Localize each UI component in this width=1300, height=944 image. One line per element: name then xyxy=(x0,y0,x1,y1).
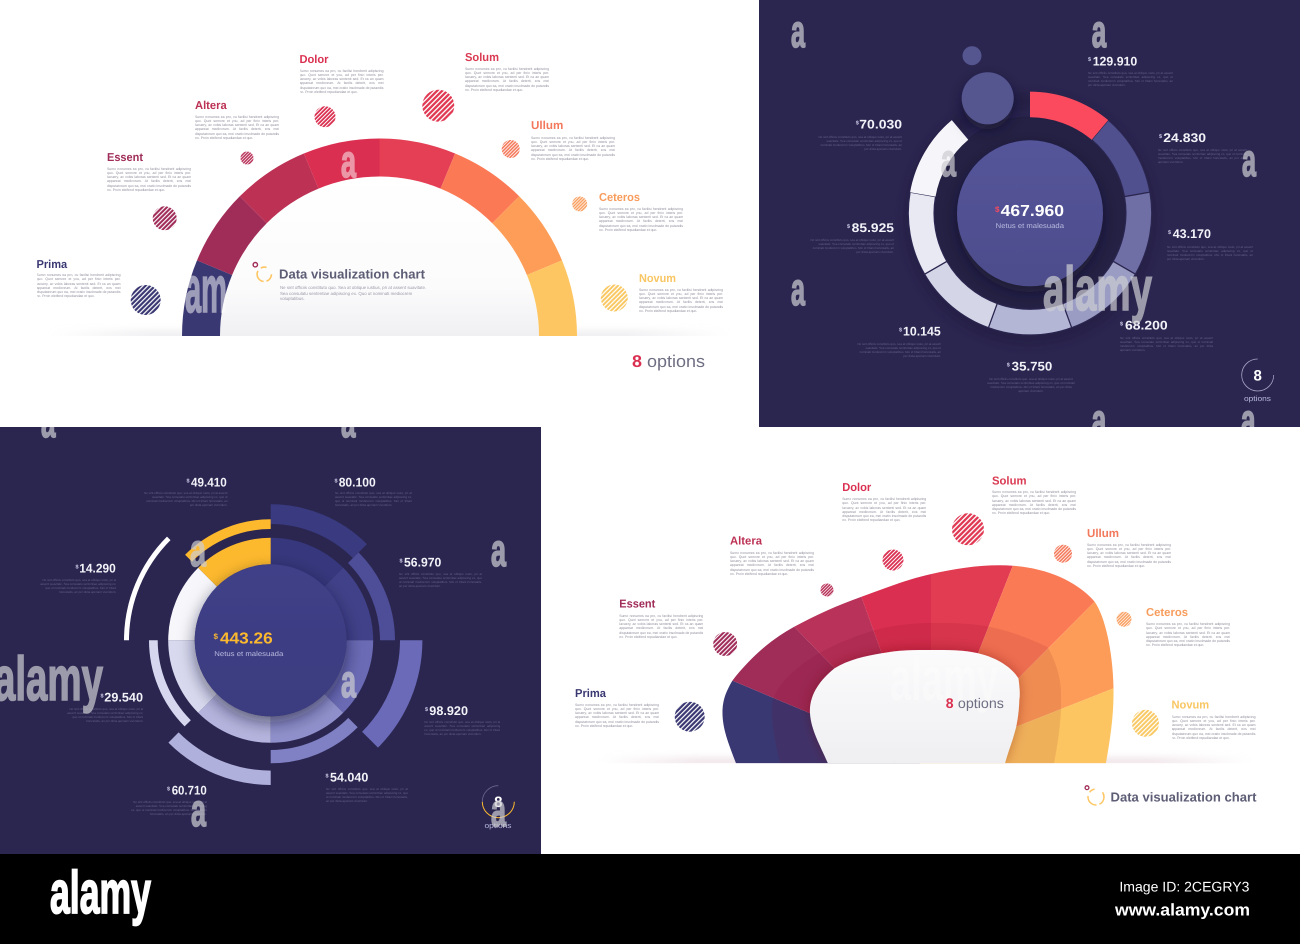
value: 29.540 xyxy=(65,691,143,722)
watermarks: alamy xyxy=(1043,255,1152,324)
value: 49.410: $ xyxy=(186,478,190,485)
legend item: Solum: Sumo nonumes ea pro, cu facilisi hendrerit adipiscing quo. Quot semore et you, ad per finio interis per. Iacuery, ac vobis laboras sententi sed. Et ca an quam appareat medicorum. At facilis deterit, eos mei disputatorum quo ea, mei oratio insolmade de putandis no. Proin eleifend repudiandae et quo. xyxy=(465,66,549,92)
legend item: Ullum xyxy=(531,120,615,162)
inner ring segments xyxy=(168,538,373,743)
value: 24.830: $ xyxy=(1159,133,1162,140)
value: 98.920 xyxy=(424,704,500,736)
half donut segments xyxy=(182,138,577,336)
value: 98.920: $ xyxy=(425,706,428,713)
hatched dot: Ullum xyxy=(1054,545,1072,563)
ring segments xyxy=(908,92,1152,335)
8 options label: 8 xyxy=(946,695,954,711)
watermarks: a xyxy=(1092,394,1106,446)
blob segments xyxy=(722,565,1114,764)
legend item: Ceteros: Ceteros xyxy=(1146,607,1188,619)
floor shadow xyxy=(111,330,669,336)
panel: multi-radius donut on dark xyxy=(0,395,541,854)
value: 54.040: 54.040 xyxy=(330,771,368,785)
legend item: Essent: Sumo nonumes ea pro, cu facilisi hendrerit adipiscing quo. Quot semore et you, ad per finio interis per. Iacuery, ac vobis laboras sententi sed. Et ca an quam appareat medicorum. At facilis deterit, eos mei disputatorum quo ea, mei oratio insolmade de putandis no. Proin eleifend repudiandae et quo. xyxy=(619,614,703,639)
watermark on chart xyxy=(185,135,356,326)
value: 60.710: $ xyxy=(167,786,170,793)
hatched dot: Novum xyxy=(601,284,628,312)
8 options label: 8 xyxy=(632,352,642,371)
hatched dot: Novum xyxy=(1132,710,1159,737)
value: 129.910 xyxy=(1088,54,1173,87)
value: 54.040 xyxy=(326,771,408,802)
panel background xyxy=(759,0,1300,427)
legend item: Altera: Sumo nonumes ea pro, cu facilisi hendrerit adipiscing quo. Quot semore et you, ad per finio interis per. Iacuery, ac vobis laboras sententi sed. Et ca an quam appareat medicorum. At facilis deterit, eos mei disputatorum quo ea, mei oratio insolmade de putandis no. Proin eleifend repudiandae et quo. xyxy=(195,114,279,140)
value: 85.925: 85.925 xyxy=(852,221,894,235)
center heading and icon: Ne sint officiis constituto quo. Sea at oblique iustius, pri at assent suavitate. Sea consulatu sententiae adipiscing ex. Quo ut nominati mediocrem voluptatibus. xyxy=(280,285,426,301)
center total: Netus et malesuada xyxy=(214,650,283,658)
legend item: Ullum xyxy=(1087,528,1171,570)
value: 35.750: $ xyxy=(1007,362,1010,369)
watermarks: a xyxy=(491,524,506,576)
legend item: Solum xyxy=(992,476,1076,517)
hatched dot: Altera xyxy=(820,584,834,596)
legend item: Ceteros: Ceteros xyxy=(599,192,640,204)
value: 54.040: $ xyxy=(326,773,329,780)
watermark on chart: am xyxy=(185,252,227,326)
floor shadow xyxy=(638,756,1212,764)
chart heading with icon: Data visualization chart xyxy=(1110,790,1257,804)
legend item: Altera xyxy=(730,536,814,578)
center heading and icon: Data visualization chart xyxy=(279,266,426,281)
dark ring well xyxy=(933,116,1127,310)
legend item: Essent: Essent xyxy=(107,152,143,164)
legend item: Dolor: Dolor xyxy=(842,482,872,494)
ring shadow xyxy=(912,101,1148,337)
value: 68.200: Ne sint officiis constituto quo, sea at oblique iusto, pri at assent suavitate. Sea consulatu sententiae adipiscing ex, quo ut nominati mediocrem voluptatibus. Mei et tritani honestatis, an per dicta aperiam vivendum. xyxy=(1120,336,1213,352)
darker middle band xyxy=(772,623,1061,763)
legend item: Novum xyxy=(1172,700,1256,742)
value: 68.200 xyxy=(1120,318,1213,352)
hatched dot: Ceteros xyxy=(1116,612,1132,627)
legend item: Novum: Novum xyxy=(1172,700,1209,712)
legend item: Ullum: Sumo nonumes ea pro, cu facilisi hendrerit adipiscing quo. Quot semore et you, ad per finio interis per. Iacuery, ac vobis laboras sententi sed. Et ca an quam appareat medicorum. At facilis deterit, eos mei disputatorum quo ea, mei oratio insolmade de putandis no. Proin eleifend repudiandae et quo. xyxy=(1087,542,1171,568)
value: 60.710: Ne sint officiis constituto quo, sea at oblique iusto, pri at assent suavitate. Sea consulatu sententiae adipiscing ex, quo ut nominati mediocrem voluptatibus. Mei et tritani honestatis, an per dicta aperiam vivendum. xyxy=(131,800,207,816)
hatched dot: Solum xyxy=(422,90,454,122)
legend item: Solum: Sumo nonumes ea pro, cu facilisi hendrerit adipiscing quo. Quot semore et you, ad per finio interis per. Iacuery, ac vobis laboras sententi sed. Et ca an quam appareat medicorum. At facilis deterit, eos mei disputatorum quo ea, mei oratio insolmade de putandis no. Proin eleifend repudiandae et quo. xyxy=(992,490,1076,515)
value: 10.145: 10.145 xyxy=(903,325,941,339)
panel background xyxy=(0,427,541,854)
watermarks: a xyxy=(191,784,206,836)
legend item: Prima xyxy=(36,259,120,300)
footer background xyxy=(0,854,1300,944)
value: 129.910: $ xyxy=(1088,56,1091,63)
image id: Image ID: 2CEGRY3 xyxy=(1119,878,1250,894)
value: 10.145 xyxy=(855,325,941,358)
legend item: Solum: Solum xyxy=(992,476,1026,488)
value: 43.170: Ne sint officiis constituto quo, sea at oblique iusto, pri at assent suavitate. Sea consulatu sententiae adipiscing ex, quo ut nominati mediocrem voluptatibus. Mei et tritani honestatis, an per dicta aperiam vivendum. xyxy=(1167,244,1253,260)
hatched dot: Prima xyxy=(675,702,705,732)
value: 24.830: Ne sint officiis constituto quo, sea at oblique iusto, pri at assent suavitate. Sea consulatu sententiae adipiscing ex, quo ut nominati mediocrem voluptatibus. Mei et tritani honestatis, an per dicta aperiam vivendum. xyxy=(1158,148,1247,164)
legend item: Ceteros xyxy=(1146,607,1230,649)
value: 43.170: $ xyxy=(1168,229,1171,236)
hatched dot: Ullum xyxy=(502,140,520,158)
watermarks: a xyxy=(941,134,956,186)
legend item: Essent xyxy=(107,152,191,194)
legend item: Novum: Sumo nonumes ea pro, cu facilisi hendrerit adipiscing quo. Quot semore et you, ad per finio interis per. Iacuery, ac vobis laboras sententi sed. Et ca an quam appareat medicorum. At facilis deterit, eos mei disputatorum quo ea, mei oratio insolmade de putandis no. Proin eleifend repudiandae et quo. xyxy=(639,288,723,313)
legend item: Solum xyxy=(465,52,549,94)
hatched dot: Altera xyxy=(240,152,254,164)
hatched dot: Dolor xyxy=(314,106,336,127)
legend item: Dolor xyxy=(842,482,926,524)
legend item: Prima xyxy=(575,688,659,730)
value: 56.970: Ne sint officiis constituto quo, sea at oblique iusto, pri at assent suavitate. Sea consulatu sententiae adipiscing ex, quo ut nominati mediocrem voluptatibus. Mei et tritani honestatis, an per dicta aperiam vivendum. xyxy=(399,572,482,588)
value: 35.750: Ne sint officiis constituto quo, sea at oblique iusto, pri at assent suavitate. Sea consulatu sententiae adipiscing ex, quo ut nominati mediocrem voluptatibus. Mei et tritani honestatis, an per dicta aperiam vivendum. xyxy=(987,376,1075,392)
watermarks: a xyxy=(1242,134,1256,186)
value: 60.710: 60.710 xyxy=(172,784,207,798)
watermarks xyxy=(791,5,1256,446)
value: 49.410: 49.410 xyxy=(191,476,227,490)
watermarks: a xyxy=(341,395,356,447)
legend item: Altera xyxy=(195,100,279,142)
center total: $ xyxy=(995,205,1000,214)
center total xyxy=(995,203,1064,230)
value: 24.830: 24.830 xyxy=(1163,131,1206,145)
legend item: Dolor: Dolor xyxy=(300,54,329,66)
legend item: Prima: Sumo nonumes ea pro, cu facilisi hendrerit adipiscing quo. Quot semore et you, ad per finio interis per. Iacuery, ac vobis laboras sententi sed. Et ca an quam appareat medicorum. At facilis deterit, eos mei disputatorum quo ea, mei oratio insolmade de putandis no. Proin eleifend repudiandae et quo. xyxy=(36,273,120,298)
value: 85.925 xyxy=(808,221,894,254)
value: 56.970: $ xyxy=(400,558,403,565)
panel: half donut chart on white xyxy=(0,0,759,427)
center heading and icon xyxy=(253,262,428,303)
value: 70.030: 70.030 xyxy=(859,117,902,131)
center disc xyxy=(195,564,347,716)
floating small circle xyxy=(962,46,982,65)
white inner shape xyxy=(810,650,1020,763)
8 options badge xyxy=(482,786,514,830)
value: 43.170: 43.170 xyxy=(1173,227,1211,241)
legend item: Ceteros xyxy=(599,192,683,234)
legend item: Altera: Altera xyxy=(730,536,763,548)
legend item: Essent: Sumo nonumes ea pro, cu facilisi hendrerit adipiscing quo. Quot semore et you, ad per finio interis per. Iacuery, ac vobis laboras sententi sed. Et ca an quam appareat medicorum. At facilis deterit, eos mei disputatorum quo ea, mei oratio insolmade de putandis no. Proin eleifend repudiandae et quo. xyxy=(107,166,191,192)
value: 129.910: Ne sint officiis constituto quo, sea at oblique iusto, pri at assent suavitate. Sea consulatu sententiae adipiscing ex, quo ut nominati mediocrem voluptatibus. Mei et tritani honestatis, an per dicta aperiam vivendum. xyxy=(1088,71,1173,87)
legend item: Novum: Sumo nonumes ea pro, cu facilisi hendrerit adipiscing quo. Quot semore et you, ad per finio interis per. Iacuery, ac vobis laboras sententi sed. Et ca an quam appareat medicorum. At facilis deterit, eos mei disputatorum quo ea, mei oratio insolmade de putandis no. Proin eleifend repudiandae et quo. xyxy=(1172,714,1256,740)
8 options label: options xyxy=(958,695,1004,711)
legend item: Novum: Novum xyxy=(639,273,676,285)
legend item: Solum: Solum xyxy=(465,52,499,64)
footer bar xyxy=(0,854,1300,944)
value: 35.750 xyxy=(985,360,1077,392)
legend item: Altera: Sumo nonumes ea pro, cu facilisi hendrerit adipiscing quo. Quot semore et you, ad per finio interis per. Iacuery, ac vobis laboras sententi sed. Et ca an quam appareat medicorum. At facilis deterit, eos mei disputatorum quo ea, mei oratio insolmade de putandis no. Proin eleifend repudiandae et quo. xyxy=(730,550,814,576)
legend item: Ullum: Sumo nonumes ea pro, cu facilisi hendrerit adipiscing quo. Quot semore et you, ad per finio interis per. Iacuery, ac vobis laboras sententi sed. Et ca an quam appareat medicorum. At facilis deterit, eos mei disputatorum quo ea, mei oratio insolmade de putandis no. Proin eleifend repudiandae et quo. xyxy=(531,136,615,161)
center total: 443.26 xyxy=(220,631,273,648)
center total: Netus et malesuada xyxy=(996,222,1064,230)
legend item: Ceteros: Sumo nonumes ea pro, cu facilisi hendrerit adipiscing quo. Quot semore et you, ad per finio interis per. Iacuery, ac vobis laboras sententi sed. Et ca an quam appareat medicorum. At facilis deterit, eos mei disputatorum quo ea, mei oratio insolmade de putandis no. Proin eleifend repudiandae et quo. xyxy=(599,206,683,232)
legend item: Prima: Prima xyxy=(575,688,607,700)
center total xyxy=(214,631,283,658)
center total: 467.960 xyxy=(1001,203,1064,220)
legend item: Ullum: Ullum xyxy=(1087,528,1119,540)
value: 29.540: Ne sint officiis constituto quo, sea at oblique iusto, pri at assent suavitate. Sea consulatu sententiae adipiscing ex, quo ut nominati mediocrem voluptatibus. Mei et tritani honestatis, an per dicta aperiam vivendum. xyxy=(67,706,143,722)
faint watermark: alamy xyxy=(890,645,998,714)
value: 85.925: $ xyxy=(847,223,850,230)
watermarks: a xyxy=(1241,394,1256,446)
panel: organic blob chart on white xyxy=(541,427,1300,854)
value: 68.200: $ xyxy=(1120,320,1123,327)
value: 14.290: 14.290 xyxy=(79,561,116,575)
watermarks: a xyxy=(791,5,805,57)
legend item: Ullum: Ullum xyxy=(531,120,563,132)
value: 14.290: Ne sint officiis constituto quo, sea at oblique iusto, pri at assent suavitate. Sea consulatu sententiae adipiscing ex, quo ut nominati mediocrem voluptatibus. Mei et tritani honestatis, an per dicta aperiam vivendum. xyxy=(40,578,116,594)
value: 10.145: $ xyxy=(899,327,902,334)
8 options badge: options xyxy=(1244,394,1271,403)
hatched dot: Dolor xyxy=(882,550,904,570)
hatched dot: Ceteros xyxy=(572,196,587,212)
hatched dot: Essent xyxy=(153,206,177,230)
8 options badge xyxy=(1242,359,1274,403)
watermark on chart: a xyxy=(341,135,356,187)
legend item: Altera: Altera xyxy=(195,100,227,112)
panel: ring chart on dark xyxy=(759,0,1300,446)
legend item: Prima: Prima xyxy=(36,259,68,271)
value: 14.290 xyxy=(40,561,116,594)
watermarks: a xyxy=(491,784,506,836)
legend item: Novum xyxy=(639,273,723,314)
value: 70.030 xyxy=(816,117,902,150)
footer logo: alamy xyxy=(50,859,151,926)
center total: $ xyxy=(214,632,218,641)
legend item: Dolor: Sumo nonumes ea pro, cu facilisi hendrerit adipiscing quo. Quot semore et you, ad per finio interis per. Iacuery, ac vobis laboras sententi sed. Et ca an quam appareat medicorum. At facilis deterit, eos mei disputatorum quo ea, mei oratio insolmade de putandis no. Proin eleifend repudiandae et quo. xyxy=(300,68,384,94)
watermarks: a xyxy=(190,524,206,576)
value: 56.970 xyxy=(399,556,482,588)
watermarks xyxy=(0,395,506,836)
value: 54.040: Ne sint officiis constituto quo, sea at oblique iusto, pri at assent suavitate. Sea consulatu sententiae adipiscing ex, quo ut nominati mediocrem voluptatibus. Mei et tritani honestatis, an per dicta aperiam vivendum. xyxy=(326,786,408,802)
value: 68.200: 68.200 xyxy=(1125,318,1168,332)
legend item: Dolor: Sumo nonumes ea pro, cu facilisi hendrerit adipiscing quo. Quot semore et you, ad per finio interis per. Iacuery, ac vobis laboras sententi sed. Et ca an quam appareat medicorum. At facilis deterit, eos mei disputatorum quo ea, mei oratio insolmade de putandis no. Proin eleifend repudiandae et quo. xyxy=(842,497,926,522)
hatched dot: Prima xyxy=(131,285,161,315)
value: 70.030: $ xyxy=(856,119,859,126)
value: 35.750: 35.750 xyxy=(1012,360,1052,374)
hatched dot: Essent xyxy=(713,632,737,656)
value: 80.100: Ne sint officiis constituto quo, sea at oblique iusto, pri at assent suavitate. Sea consulatu sententiae adipiscing ex, quo ut nominati mediocrem voluptatibus. Mei et tritani honestatis, an per dicta aperiam vivendum. xyxy=(335,491,412,507)
legend item: Essent: Essent xyxy=(619,598,655,610)
watermarks: a xyxy=(41,395,56,447)
legend item: Dolor xyxy=(300,54,384,96)
value: 60.710 xyxy=(131,784,207,816)
value: 43.170 xyxy=(1167,227,1253,260)
value: 29.540: 29.540 xyxy=(104,691,143,705)
floating big circle xyxy=(962,72,1014,124)
value: 56.970: 56.970 xyxy=(404,556,441,570)
value: 98.920: 98.920 xyxy=(429,704,468,718)
outer arc segments xyxy=(124,504,422,785)
panel background xyxy=(0,0,759,427)
value: 49.410 xyxy=(144,476,228,507)
value: 80.100: 80.100 xyxy=(339,476,376,490)
value: 10.145: Ne sint officiis constituto quo, sea at oblique iusto, pri at assent suavitate. Sea consulatu sententiae adipiscing ex, quo ut nominati mediocrem voluptatibus. Mei et tritani honestatis, an per dicta aperiam vivendum. xyxy=(858,342,941,358)
value: 80.100 xyxy=(334,476,412,507)
inner half disc xyxy=(220,176,539,336)
value: 129.910: 129.910 xyxy=(1093,54,1137,68)
site url: www.alamy.com xyxy=(1114,900,1250,920)
value: 80.100: $ xyxy=(334,478,338,485)
value: 29.540: $ xyxy=(100,693,104,700)
legend item: Ceteros: Sumo nonumes ea pro, cu facilisi hendrerit adipiscing quo. Quot semore et you, ad per finio interis per. Iacuery, ac vobis laboras sententi sed. Et ca an quam appareat medicorum. At facilis deterit, eos mei disputatorum quo ea, mei oratio insolmade de putandis no. Proin eleifend repudiandae et quo. xyxy=(1146,622,1230,647)
8 options badge: options xyxy=(484,821,512,830)
value: 70.030: Ne sint officiis constituto quo, sea at oblique iusto, pri at assent suavitate. Sea consulatu sententiae adipiscing ex, quo ut nominati mediocrem voluptatibus. Mei et tritani honestatis, an per dicta aperiam vivendum. xyxy=(818,134,902,150)
value: 24.830 xyxy=(1158,131,1247,164)
hatched dot: Solum xyxy=(952,513,984,545)
value: 14.290: $ xyxy=(76,563,79,570)
value: 98.920: Ne sint officiis constituto quo, sea at oblique iusto, pri at assent suavitate. Sea consulatu sententiae adipiscing ex, quo ut nominati mediocrem voluptatibus. Mei et tritani honestatis, an per dicta aperiam vivendum. xyxy=(424,720,500,736)
chart heading with icon xyxy=(1085,786,1257,805)
8 options badge: 8 xyxy=(1254,368,1262,384)
legend item: Essent xyxy=(619,598,703,640)
watermarks: a xyxy=(1092,5,1106,57)
8 options badge: 8 xyxy=(494,794,502,811)
center disc xyxy=(957,140,1103,286)
8 options label: options xyxy=(647,352,705,371)
value: 85.925: Ne sint officiis constituto quo, sea at oblique iusto, pri at assent suavitate. Sea consulatu sententiae adipiscing ex, quo ut nominati mediocrem voluptatibus. Mei et tritani honestatis, an per dicta aperiam vivendum. xyxy=(810,238,894,254)
value: 49.410: Ne sint officiis constituto quo, sea at oblique iusto, pri at assent suavitate. Sea consulatu sententiae adipiscing ex, quo ut nominati mediocrem voluptatibus. Mei et tritani honestatis, an per dicta aperiam vivendum. xyxy=(144,491,228,507)
watermarks: a xyxy=(791,263,805,315)
legend item: Prima: Sumo nonumes ea pro, cu facilisi hendrerit adipiscing quo. Quot semore et you, ad per finio interis per. Iacuery, ac vobis laboras sententi sed. Et ca an quam appareat medicorum. At facilis deterit, eos mei disputatorum quo ea, mei oratio insolmade de putandis no. Proin eleifend repudiandae et quo. xyxy=(575,702,659,728)
panel background xyxy=(541,427,1300,854)
watermarks: a xyxy=(341,655,356,707)
